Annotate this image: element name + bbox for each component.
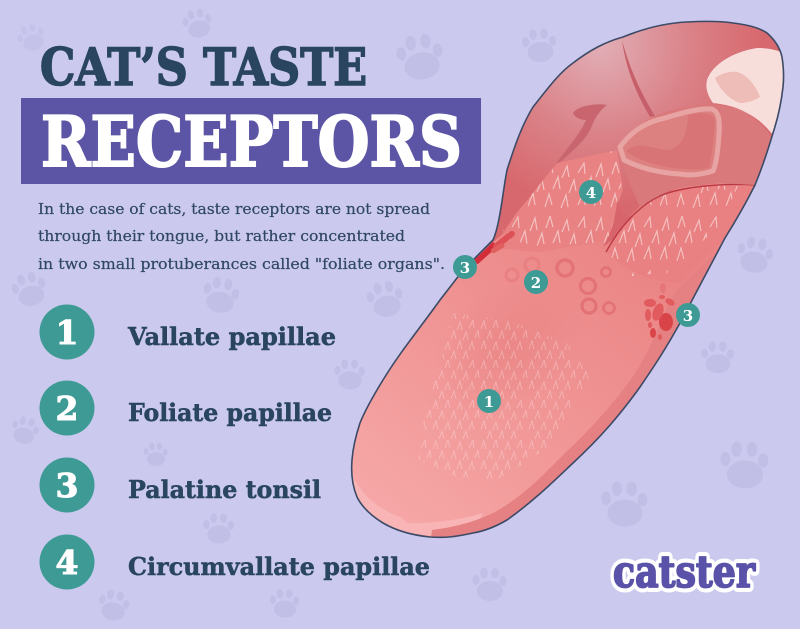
tongue center shade bbox=[481, 329, 528, 372]
legend item 2 bbox=[40, 380, 332, 436]
right lobe marks bbox=[606, 185, 738, 276]
badge 1: 1 bbox=[484, 393, 494, 411]
intro text: in two small protuberances called "foliate organs". bbox=[38, 255, 445, 273]
soft palate white area bbox=[706, 48, 790, 135]
field 4 marks bbox=[497, 150, 624, 246]
intro text: through their tongue, but rather concentrated bbox=[38, 227, 405, 245]
legend item 3: Palatine tonsil bbox=[128, 475, 321, 504]
right lobe bbox=[617, 216, 634, 236]
epiglottis ring bbox=[620, 109, 719, 175]
legend item 3 bbox=[40, 458, 321, 512]
badge 4 bbox=[579, 180, 603, 204]
field 1 marks bbox=[418, 313, 590, 480]
legend item 1: Vallate papillae bbox=[127, 322, 336, 351]
left papillae field bbox=[493, 150, 623, 252]
tongue back section bbox=[486, 22, 780, 248]
badge 3 left: 3 bbox=[460, 259, 470, 277]
badge 3 left bbox=[453, 255, 477, 279]
badge 4: 4 bbox=[586, 184, 596, 202]
badge 2 bbox=[524, 270, 548, 294]
crease line bbox=[622, 40, 655, 117]
epiglottis shape bbox=[618, 105, 772, 207]
epiglottis inner shade bbox=[627, 113, 715, 169]
legend item 4: 4 bbox=[56, 543, 78, 582]
title line one: CAT’S TASTE bbox=[40, 38, 367, 98]
tongue tip highlight bbox=[353, 477, 483, 536]
legend item 3: 3 bbox=[56, 466, 78, 505]
badge 3 right bbox=[676, 303, 700, 327]
legend item 4 bbox=[40, 534, 430, 590]
legend item 1: 1 bbox=[56, 313, 78, 352]
tongue outline bbox=[352, 21, 784, 537]
title banner: RECEPTORS bbox=[41, 102, 462, 183]
intro text bbox=[38, 200, 445, 273]
legend item 2: Foliate papillae bbox=[128, 398, 332, 427]
side fold bbox=[553, 104, 607, 168]
left tonsil bbox=[474, 230, 515, 264]
fold between fields bbox=[603, 200, 631, 247]
badge 2: 2 bbox=[531, 274, 541, 292]
tongue lower edge shading bbox=[431, 331, 669, 536]
legend item 2: 2 bbox=[56, 389, 78, 428]
legend item 4: Circumvallate papillae bbox=[128, 552, 430, 581]
lobe red outline bbox=[606, 184, 756, 252]
tongue front surface bbox=[352, 183, 736, 536]
foliate rings bbox=[506, 258, 614, 314]
catster logo: catster bbox=[613, 547, 756, 598]
badge 1 bbox=[477, 389, 501, 413]
badge 3 right: 3 bbox=[683, 307, 693, 325]
legend item 1 bbox=[40, 304, 336, 360]
tongue illustration bbox=[340, 0, 790, 550]
right tonsil bbox=[644, 283, 676, 340]
legend bbox=[40, 304, 430, 590]
catster logo: catster bbox=[613, 547, 756, 598]
intro text: In the case of cats, taste receptors are not spread bbox=[38, 200, 430, 218]
soft palate inner shape bbox=[715, 72, 760, 103]
